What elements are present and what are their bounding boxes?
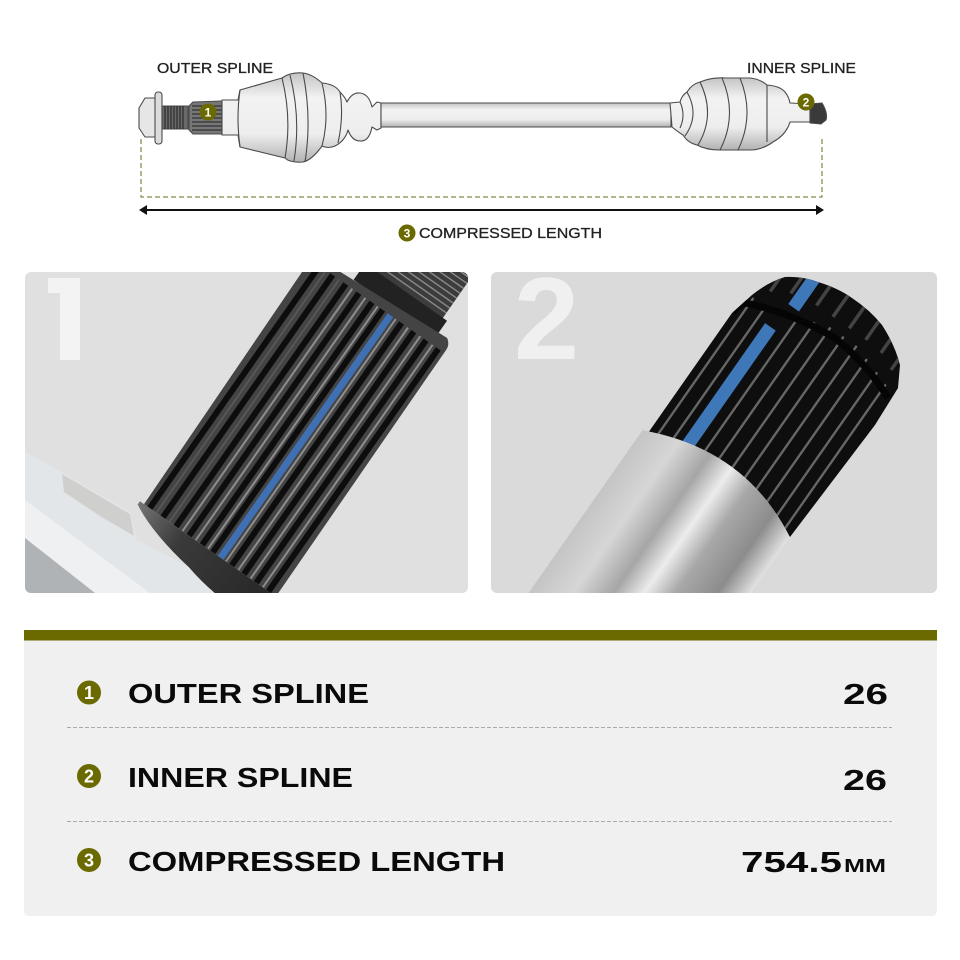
callout badge 3: 3 <box>404 226 411 240</box>
dashed length bracket <box>141 139 822 197</box>
spline body <box>144 272 448 593</box>
boot fold lines <box>238 73 342 162</box>
row 1: 1 <box>84 683 94 703</box>
spline body <box>649 276 900 537</box>
inner spline section <box>810 103 826 124</box>
olive header bar <box>24 630 937 640</box>
axle shaft <box>381 103 671 127</box>
row 2: 2 <box>84 766 94 786</box>
row 1 <box>77 678 888 711</box>
metal hub <box>25 474 150 593</box>
row 1: OUTER SPLINE <box>128 678 369 709</box>
row 3: 754.5 <box>741 847 842 879</box>
callout badge 1 <box>200 104 216 120</box>
big number 1: 1 <box>35 254 101 386</box>
silver shaft <box>528 430 790 593</box>
outer spline section <box>189 101 222 134</box>
row 1: 26 <box>843 679 888 711</box>
row 3: 3 <box>84 850 94 870</box>
label: inner spline: INNER SPLINE <box>747 61 856 77</box>
row 3: MM <box>844 856 886 876</box>
big number 2: 2 <box>514 253 579 384</box>
inner boot fold lines <box>680 78 767 150</box>
big number 1 <box>48 278 80 360</box>
label: compressed length: COMPRESSED LENGTH <box>419 226 602 242</box>
length arrow <box>139 205 824 215</box>
callout badge 3 <box>398 224 416 242</box>
threaded end <box>354 272 468 333</box>
row 2 <box>77 762 887 797</box>
callout badge 1: 1 <box>205 106 212 120</box>
panel: inner spline photo <box>491 272 937 593</box>
panel: outer spline photo <box>25 272 468 593</box>
blue marker stripe <box>682 278 820 446</box>
spline shaft <box>138 272 468 593</box>
panel: specification table <box>24 630 937 916</box>
row 2: 26 <box>843 765 887 797</box>
callout badge 2 <box>798 94 814 110</box>
outer joint and boot <box>222 73 381 162</box>
label: outer spline: OUTER SPLINE <box>157 61 273 77</box>
retaining band <box>733 303 888 398</box>
flange collar <box>138 501 270 593</box>
outer end bolt <box>139 92 188 144</box>
inner joint and boot <box>670 78 810 150</box>
axle diagram <box>139 73 826 162</box>
row 3 <box>77 846 886 879</box>
row 3: COMPRESSED LENGTH <box>128 846 505 877</box>
table background <box>24 636 937 916</box>
callout badge 2: 2 <box>803 96 810 110</box>
blue marker stripe <box>218 313 393 560</box>
row 2: INNER SPLINE <box>128 762 353 793</box>
